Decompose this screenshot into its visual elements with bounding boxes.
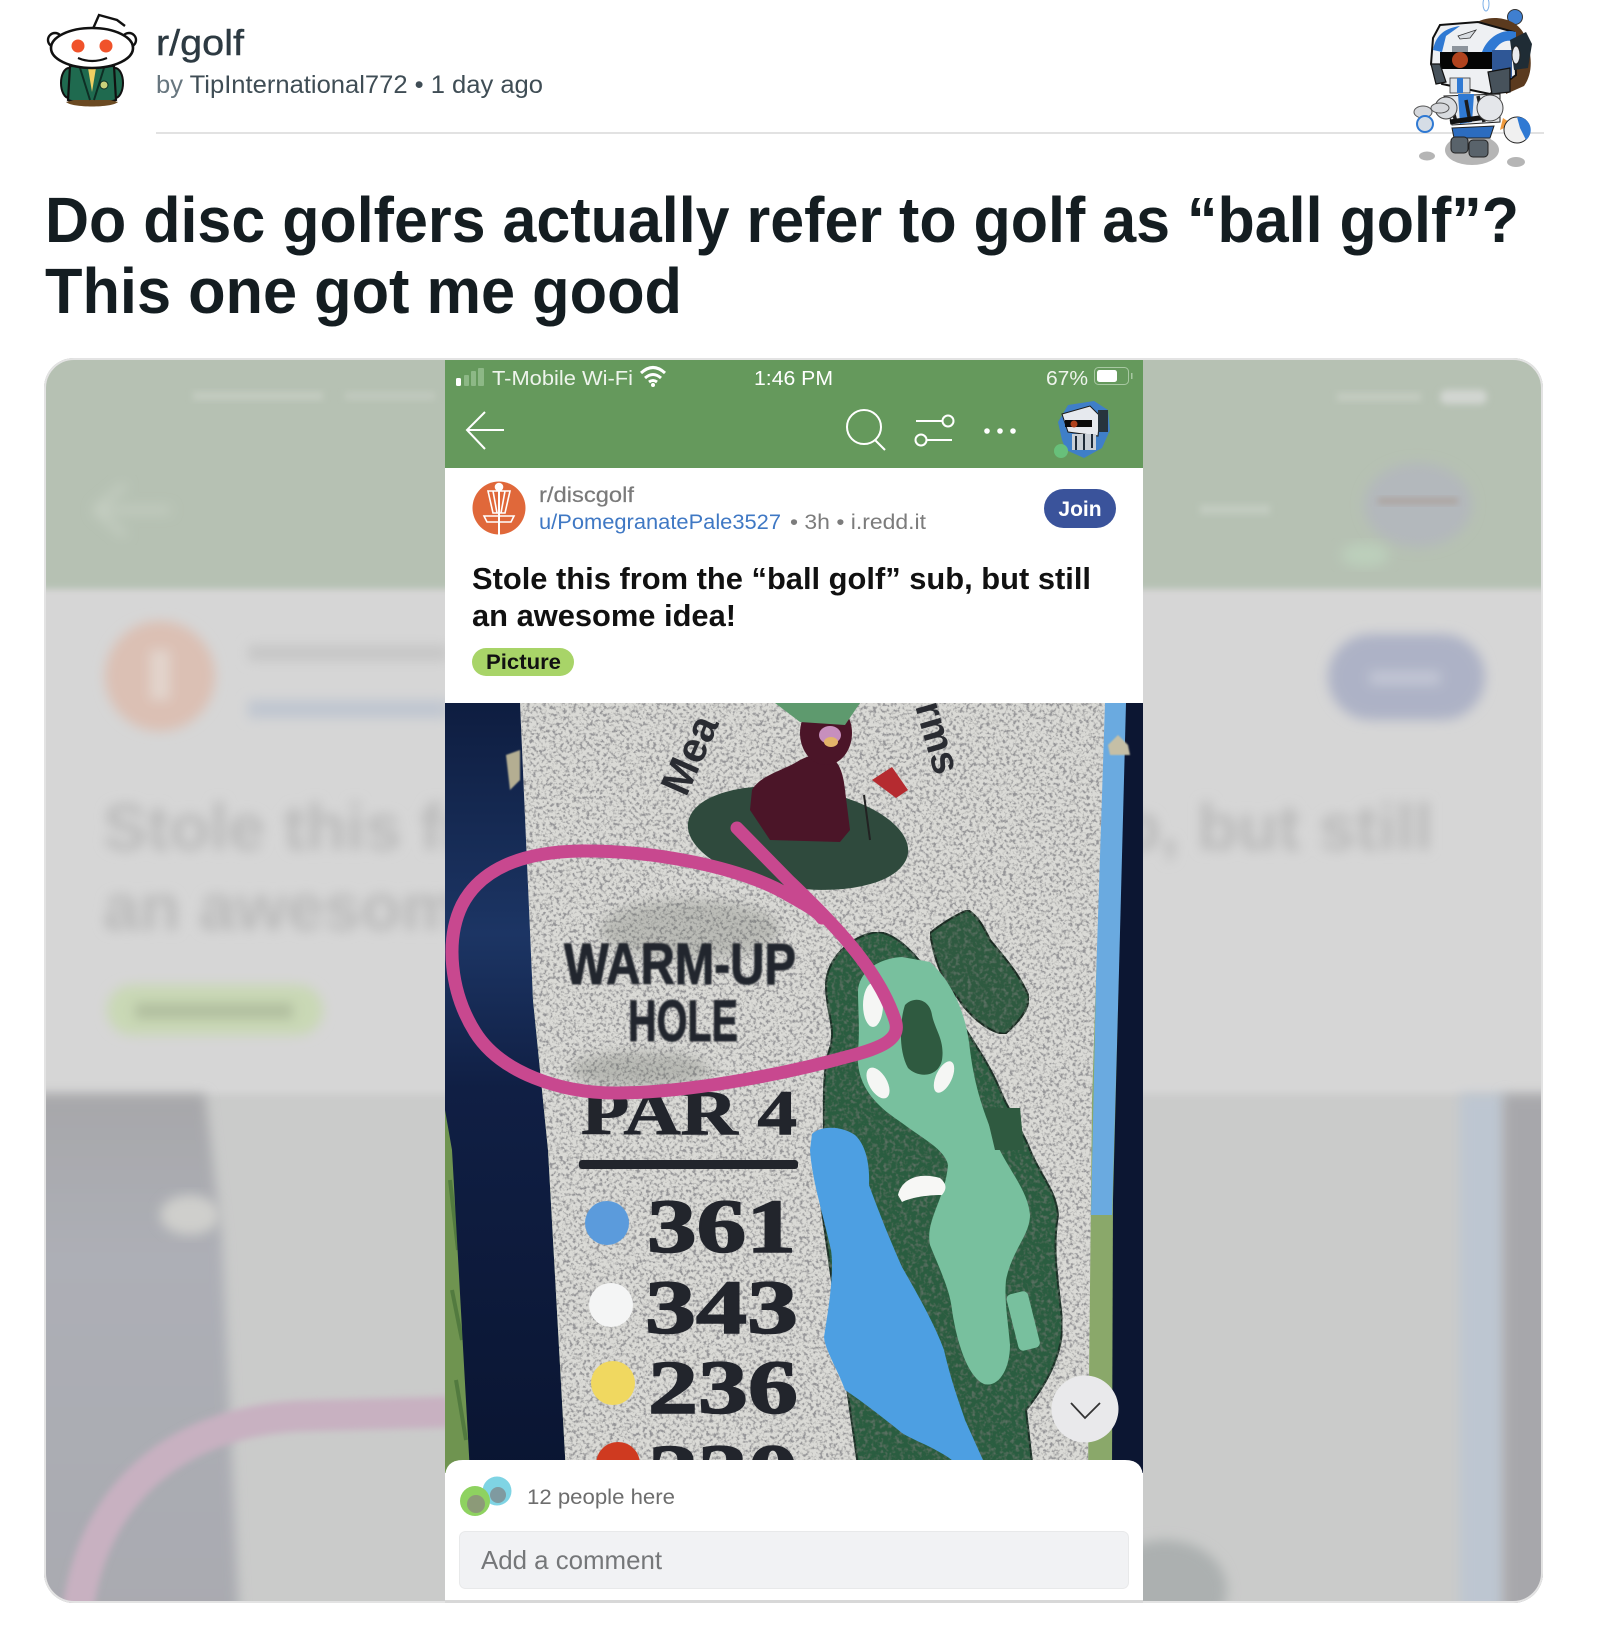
blue tee: 361 [647, 1185, 796, 1269]
granite sign plate [520, 703, 1105, 1473]
post header [472, 482, 1116, 536]
white tee: 343 [645, 1266, 798, 1350]
post title: This one got me good [45, 255, 682, 327]
blurred photo [44, 1088, 1543, 1603]
comment bar [445, 1460, 1143, 1603]
water hazard [810, 1128, 983, 1460]
icon: user avatar mini [1054, 401, 1110, 458]
subreddit name: r/golf [156, 22, 245, 63]
hole map: fairway and water [810, 910, 1062, 1480]
white tee [589, 1281, 796, 1334]
red tee: 230 [648, 1430, 798, 1514]
icon: search [847, 410, 885, 450]
app bar [445, 360, 1143, 468]
icon: online avatars [460, 1476, 512, 1516]
icon: disc golf community logo [472, 482, 526, 536]
join button: Join [1058, 498, 1102, 521]
user avatar: robot character [1414, 0, 1532, 167]
screenshot post title: an awesome idea! [472, 598, 736, 633]
photo: golf hole sign [445, 696, 1143, 1514]
author and time: by TipInternational772 • 1 day ago [156, 71, 543, 99]
sign logo: bear on green: Mea [651, 707, 728, 802]
post meta: • 3h • i.redd.it [790, 511, 926, 534]
screenshot post title [472, 561, 1091, 633]
sign text: WARM-UP HOLE: HOLE [628, 989, 738, 1054]
sign text: PAR 4: PAR 4 [581, 1077, 797, 1148]
community name: r/discgolf [539, 484, 634, 507]
sign post left [445, 703, 566, 1473]
comment input: Add a comment [481, 1545, 663, 1575]
icon: back arrow [467, 412, 504, 449]
scroll down button [1052, 1376, 1118, 1442]
sign logo: bear on green [660, 703, 954, 890]
author: u/PomegranatePale3527 [539, 511, 781, 534]
icon: wifi [641, 368, 665, 386]
screenshot post title: Stole this from the “ball golf” sub, but still [472, 561, 1091, 596]
yellow tee [591, 1361, 796, 1414]
blurred post header: an awesome idea! [103, 870, 670, 944]
clock: 1:46 PM [754, 368, 833, 390]
flair: Picture [472, 648, 574, 676]
panel: phone screenshot [445, 360, 1143, 1603]
sign post right [1112, 703, 1143, 1473]
sign logo: bear on green: rms [906, 696, 969, 779]
battery percentage: 67% [1046, 368, 1088, 390]
yellow tee: 236 [648, 1346, 798, 1430]
sign text: WARM-UP HOLE: WARM-UP [564, 932, 796, 997]
blurred app bar [44, 358, 1543, 592]
blurred post header [103, 621, 1485, 1035]
flair: Picture: Picture [486, 651, 561, 674]
post title: Do disc golfers actually refer to golf as “ball golf”? [45, 184, 1519, 256]
icon: more dots [984, 428, 1016, 434]
blurred post header: Stole this from the “ball golf” sub, but still [103, 790, 1433, 864]
blue tee [585, 1200, 792, 1254]
tee distances [585, 1200, 796, 1460]
icon: battery [1094, 368, 1132, 384]
red tee [596, 1442, 794, 1460]
post title [45, 184, 1519, 327]
icon: filter sliders [916, 416, 954, 446]
carrier label: T-Mobile Wi-Fi [492, 368, 633, 390]
join button [1044, 489, 1116, 528]
sign text: WARM-UP HOLE [562, 942, 796, 1043]
online count: 12 people here [527, 1486, 675, 1509]
pink circle annotation [452, 828, 896, 1093]
comment input [460, 1532, 1128, 1588]
icon: signal bars [456, 368, 484, 386]
panel: blurred screenshot background [44, 358, 1543, 1603]
subreddit avatar: snoo in green jacket [48, 15, 136, 106]
